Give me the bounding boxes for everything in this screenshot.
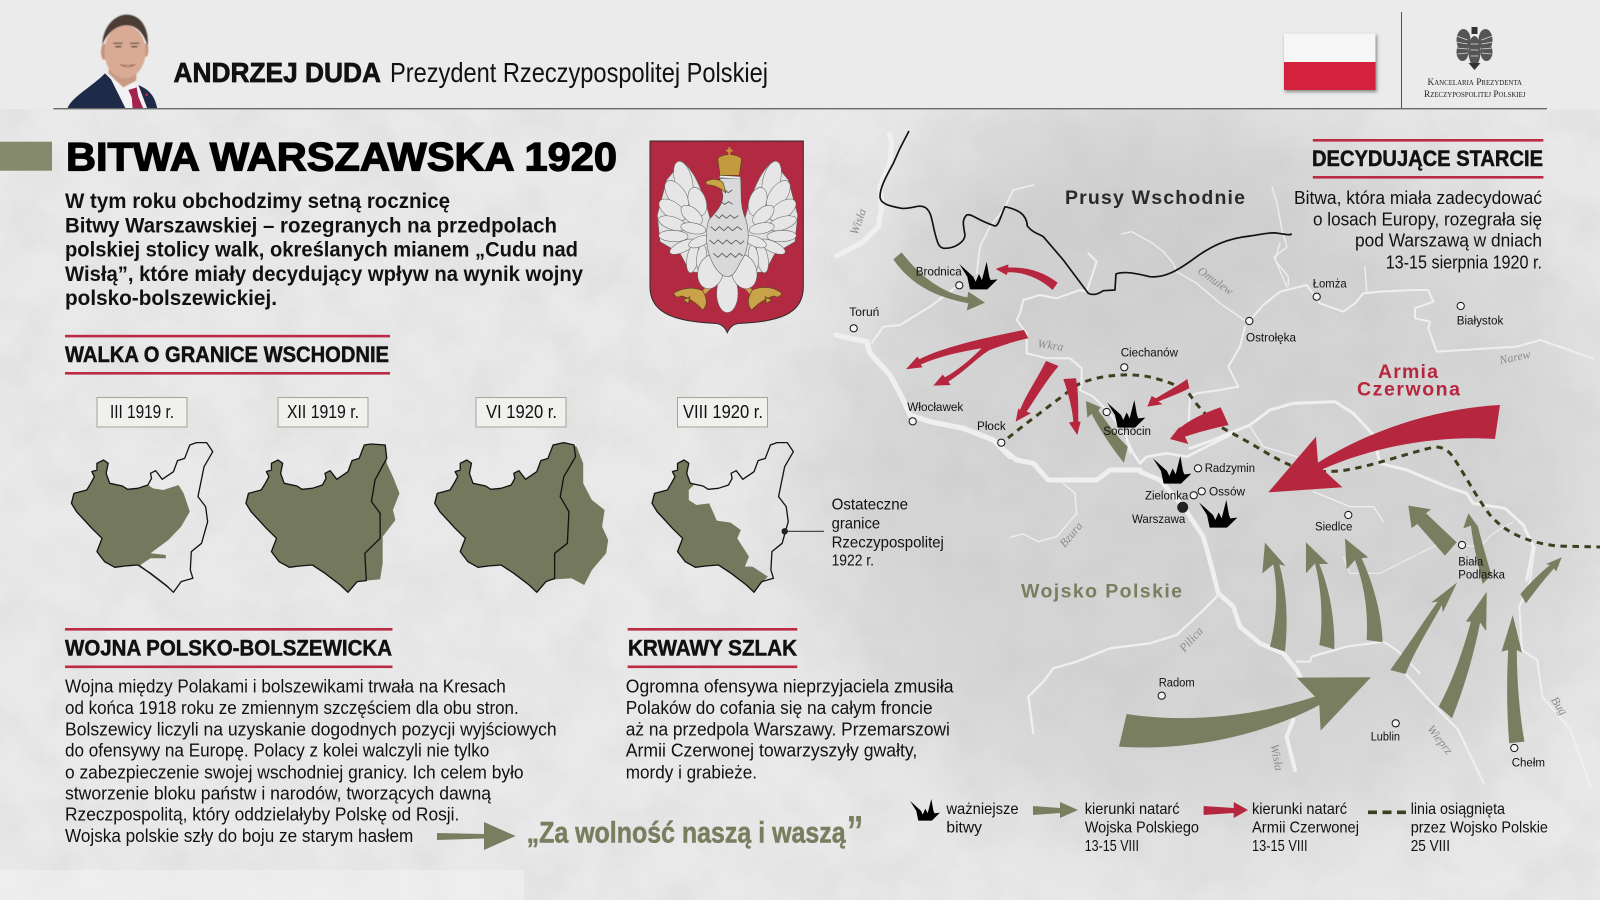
- city: Lublin: Lublin: [1371, 730, 1400, 744]
- arrow: Polish east: [1520, 557, 1562, 603]
- date label: VIII 1920: [678, 398, 768, 427]
- date label: VIII 1920: VIII 1920 r.: [683, 402, 763, 422]
- city: Radzymin: Radzymin: [1205, 461, 1255, 475]
- river names: Wisła: [847, 207, 869, 237]
- city: Ostrołęka: Ostrołęka: [1246, 331, 1296, 345]
- city: Białystok: [1457, 302, 1504, 328]
- body text: mordy i grabieże.: [626, 761, 757, 782]
- city: Płock: [977, 419, 1007, 446]
- map: XII 1919: [246, 444, 399, 592]
- body text: [65, 676, 557, 846]
- legend item: line reached: 25 VIII: [1411, 838, 1450, 855]
- city: Radom: Radom: [1159, 675, 1195, 689]
- arrow: Polish north 3: [1345, 538, 1383, 642]
- rivers: [836, 134, 1593, 787]
- body text: Ogromna ofensywa nieprzyjaciela zmusiła: [626, 676, 954, 697]
- city: Biała Podlaska: [1458, 541, 1505, 581]
- slogan: ”: [846, 807, 864, 856]
- date label: XII 1919: XII 1919 r.: [287, 402, 359, 422]
- arrow to slogan: [437, 822, 516, 850]
- arrow: Polish at Biała north: [1463, 513, 1491, 584]
- date label: VI 1920: [476, 398, 566, 427]
- arrow: Red, Brodnica: [996, 264, 1058, 290]
- title: BITWA WARSZAWSKA 1920: [66, 136, 617, 180]
- section: Decydujące starcie: [1294, 139, 1543, 272]
- callout: final borders 1922: granice: [832, 515, 880, 532]
- arrow: Polish to Biała: [1390, 582, 1457, 674]
- label: Polish Army: Wojsko Polskie: [1021, 581, 1182, 603]
- body text: [1294, 187, 1542, 272]
- city: Chełm: [1511, 744, 1545, 770]
- legend item: Polish attacks: 13-15 VIII: [1085, 838, 1139, 855]
- legend item: Red Army attacks: Armii Czerwonej: [1252, 820, 1359, 837]
- heading: WALKA O GRANICE WSCHODNIE: [65, 342, 389, 367]
- body text: Polaków do cofania się na całym froncie: [626, 697, 933, 718]
- arrow: Red, Sochocin: [1147, 379, 1189, 407]
- city: Białystok: Białystok: [1457, 314, 1504, 328]
- city: Toruń: [849, 305, 880, 332]
- icon: battle Ossów: [1199, 500, 1237, 528]
- presenter role: Prezydent Rzeczypospolitej Polskiej: [390, 57, 768, 88]
- river names: [847, 207, 1571, 772]
- callout: final borders 1922: [782, 496, 944, 570]
- coat of arms: [650, 141, 803, 333]
- body text: aż na przedpola Warszawy. Przemarszowi: [626, 718, 950, 739]
- city: Ostrołęka: [1246, 317, 1296, 345]
- city: Brodnica: [916, 265, 963, 289]
- slogan: [527, 807, 864, 856]
- body text: od końca 1918 roku ze zmiennym szczęściem dla obu stron.: [65, 697, 519, 718]
- icon: battle Sochocin: [1107, 400, 1145, 428]
- city: Siedlce: Siedlce: [1315, 520, 1352, 534]
- legend item: Red Army attacks: 13-15 VIII: [1252, 838, 1308, 855]
- heading: WOJNA POLSKO-BOLSZEWICKA: [65, 636, 392, 661]
- date label: XII 1919: [278, 398, 368, 427]
- city: Ossów: Ossów: [1209, 485, 1245, 499]
- body text: stworzenie bloku państw i narodów, tworzących dawną: [65, 782, 492, 803]
- portrait: Andrzej Duda: [67, 15, 157, 109]
- river names: Pilica: [1176, 624, 1206, 655]
- city: Chełm: Chełm: [1512, 756, 1545, 770]
- section: Walka o granice wschodnie: [65, 335, 944, 592]
- map: VI 1920: [435, 443, 608, 592]
- legend item: Polish attacks: kierunki natarć: [1085, 801, 1180, 818]
- chancellery logo: Kancelaria Prezydenta: [1428, 78, 1522, 88]
- label: East Prussia: Prusy Wschodnie: [1065, 187, 1245, 209]
- slogan: „Za wolność naszą i waszą: [527, 817, 846, 850]
- body text: do ofensywy na Europę. Polacy z kolei walczyli nie tylko: [65, 740, 489, 761]
- body text: Rzeczpospolitą, który oddzielałyby Polskę od Rosji.: [65, 804, 459, 825]
- body text: Wojska polskie szły do boju ze starym hasłem: [65, 825, 413, 846]
- arrow: Polish, Brodnica: [893, 252, 985, 311]
- body text: o losach Europy, rozegrała się: [1313, 208, 1542, 229]
- map: III 1919: [71, 443, 213, 592]
- city: Włocławek: [907, 400, 964, 425]
- title marker: [0, 142, 52, 171]
- city: Sochocin: Sochocin: [1103, 424, 1151, 438]
- river names: Wieprz: [1424, 722, 1456, 757]
- flag of Poland: [1284, 34, 1377, 92]
- intro text: W tym roku obchodzimy setną rocznicę: [65, 188, 450, 213]
- chancellery logo: [1401, 12, 1526, 109]
- label: Red Army: Armia: [1378, 361, 1438, 383]
- callout: final borders 1922: 1922 r.: [832, 553, 874, 570]
- city: Ciechanów: [1121, 346, 1178, 371]
- intro text: Wisłą”, które miały decydujący wpływ na wynik wojny: [65, 261, 583, 286]
- icon: battle Brodnica: [959, 262, 998, 289]
- river names: Omulew: [1195, 264, 1236, 298]
- chancellery logo: Rzeczypospolitej Polskiej: [1424, 90, 1526, 100]
- arrow: Red, Wkra south: [1063, 378, 1081, 435]
- river names: Bzura: [1056, 519, 1086, 550]
- river names: Bug: [1548, 694, 1571, 718]
- city: Płock: Płock: [977, 419, 1007, 433]
- icon: battle Radzymin: [1153, 456, 1191, 484]
- city: Siedlce: [1315, 511, 1352, 534]
- arrow: Polish main: [1119, 677, 1371, 747]
- body text: Armii Czerwonej towarzyszyły gwałty,: [626, 740, 917, 761]
- river names: Wisła: [1268, 743, 1286, 772]
- legend item: line reached: linia osiągnięta: [1411, 801, 1505, 818]
- arrow: Polish, Sochocin: [1086, 401, 1128, 463]
- city: Toruń: Toruń: [849, 305, 880, 319]
- city: Radom: [1158, 675, 1195, 699]
- label: Red Army: Czerwona: [1357, 379, 1460, 401]
- legend item: battles: bitwy: [946, 820, 982, 837]
- intro text: Bitwy Warszawskiej – rozegranych na przedpolach: [65, 213, 557, 238]
- city: Warszawa: Warszawa: [1132, 512, 1186, 526]
- intro text: polskiej stolicy walk, określanych mianem „Cudu nad: [65, 237, 578, 262]
- section: Wojna polsko-bolszewicka: [65, 628, 864, 856]
- river names: Wkra: [1037, 336, 1064, 354]
- legend item: line reached: przez Wojsko Polskie: [1411, 820, 1548, 837]
- map: battle of Warsaw: [836, 132, 1600, 787]
- callout: final borders 1922: Ostateczne: [832, 496, 908, 513]
- body text: [626, 676, 954, 782]
- city: Biała Podlaska: Podlaska: [1458, 567, 1505, 581]
- city: Ciechanów: Ciechanów: [1121, 346, 1178, 360]
- city: Włocławek: Włocławek: [907, 400, 964, 414]
- intro text: [65, 188, 583, 310]
- section: Krwawy szlak: [626, 628, 954, 782]
- legend: [910, 799, 1548, 855]
- date label: III 1919: [97, 398, 187, 427]
- arrow: Polish from Chełm: [1502, 615, 1524, 743]
- city: Sochocin: [1103, 408, 1151, 438]
- arrow: Polish north 2: [1306, 542, 1334, 649]
- callout: final borders 1922: Rzeczypospolitej: [832, 534, 944, 551]
- legend item: battles: [910, 799, 1019, 837]
- arrow: Polish north 1: [1262, 543, 1287, 652]
- map: VIII 1920: [652, 443, 793, 592]
- body text: Bolszewicy liczyli na uzyskanie dogodnych pozycji wyjściowych: [65, 718, 557, 739]
- arrow: Red, Radzymin: [1170, 407, 1229, 444]
- heading: KRWAWY SZLAK: [628, 636, 798, 661]
- arrow: Polish from Wieprz: [1439, 592, 1487, 718]
- date label: III 1919: III 1919 r.: [110, 402, 174, 422]
- legend item: Polish attacks: Wojska Polskiego: [1085, 820, 1199, 837]
- legend item: Polish attacks: [1033, 801, 1199, 855]
- body text: pod Warszawą w dniach: [1355, 230, 1542, 251]
- border of East Prussia: [880, 132, 1291, 295]
- date label: VI 1920: VI 1920 r.: [486, 402, 557, 422]
- river names: Narew: [1497, 347, 1532, 367]
- presenter name: ANDRZEJ DUDA: [174, 57, 381, 88]
- header: [54, 12, 1547, 109]
- body text: o zabezpieczenie swojej wschodniej granicy. Ich celem było: [65, 761, 524, 782]
- heading: DECYDUJĄCE STARCIE: [1312, 146, 1543, 171]
- city: Brodnica: Brodnica: [916, 265, 962, 279]
- arrow: Polish from Biała west: [1408, 506, 1457, 556]
- arrow: Red, Płock: [1016, 361, 1059, 422]
- arrow: Red Army main: [1268, 405, 1500, 492]
- city: Zielonka: Zielonka: [1145, 488, 1188, 502]
- legend item: Red Army attacks: kierunki natarć: [1252, 801, 1347, 818]
- legend item: battles: ważniejsze: [945, 801, 1019, 818]
- dashed line reached by Polish army: [1008, 375, 1600, 547]
- arrow: Red fork, Wkra: [906, 330, 1028, 386]
- legend item: line reached: [1368, 801, 1548, 855]
- city: Warszawa: [1132, 502, 1188, 526]
- body text: 13-15 sierpnia 1920 r.: [1386, 251, 1542, 272]
- city: Łomża: [1313, 277, 1347, 300]
- intro text: polsko-bolszewickiej.: [65, 285, 277, 310]
- legend item: Red Army attacks: [1204, 801, 1359, 855]
- city: Lublin: [1371, 720, 1400, 744]
- body text: Wojna między Polakami i bolszewikami trwała na Kresach: [65, 676, 506, 697]
- label: Red Army: [1357, 361, 1460, 401]
- city: Biała Podlaska: Biała: [1458, 555, 1483, 569]
- city: Łomża: Łomża: [1313, 277, 1347, 291]
- body text: Bitwa, która miała zadecydować: [1294, 187, 1542, 208]
